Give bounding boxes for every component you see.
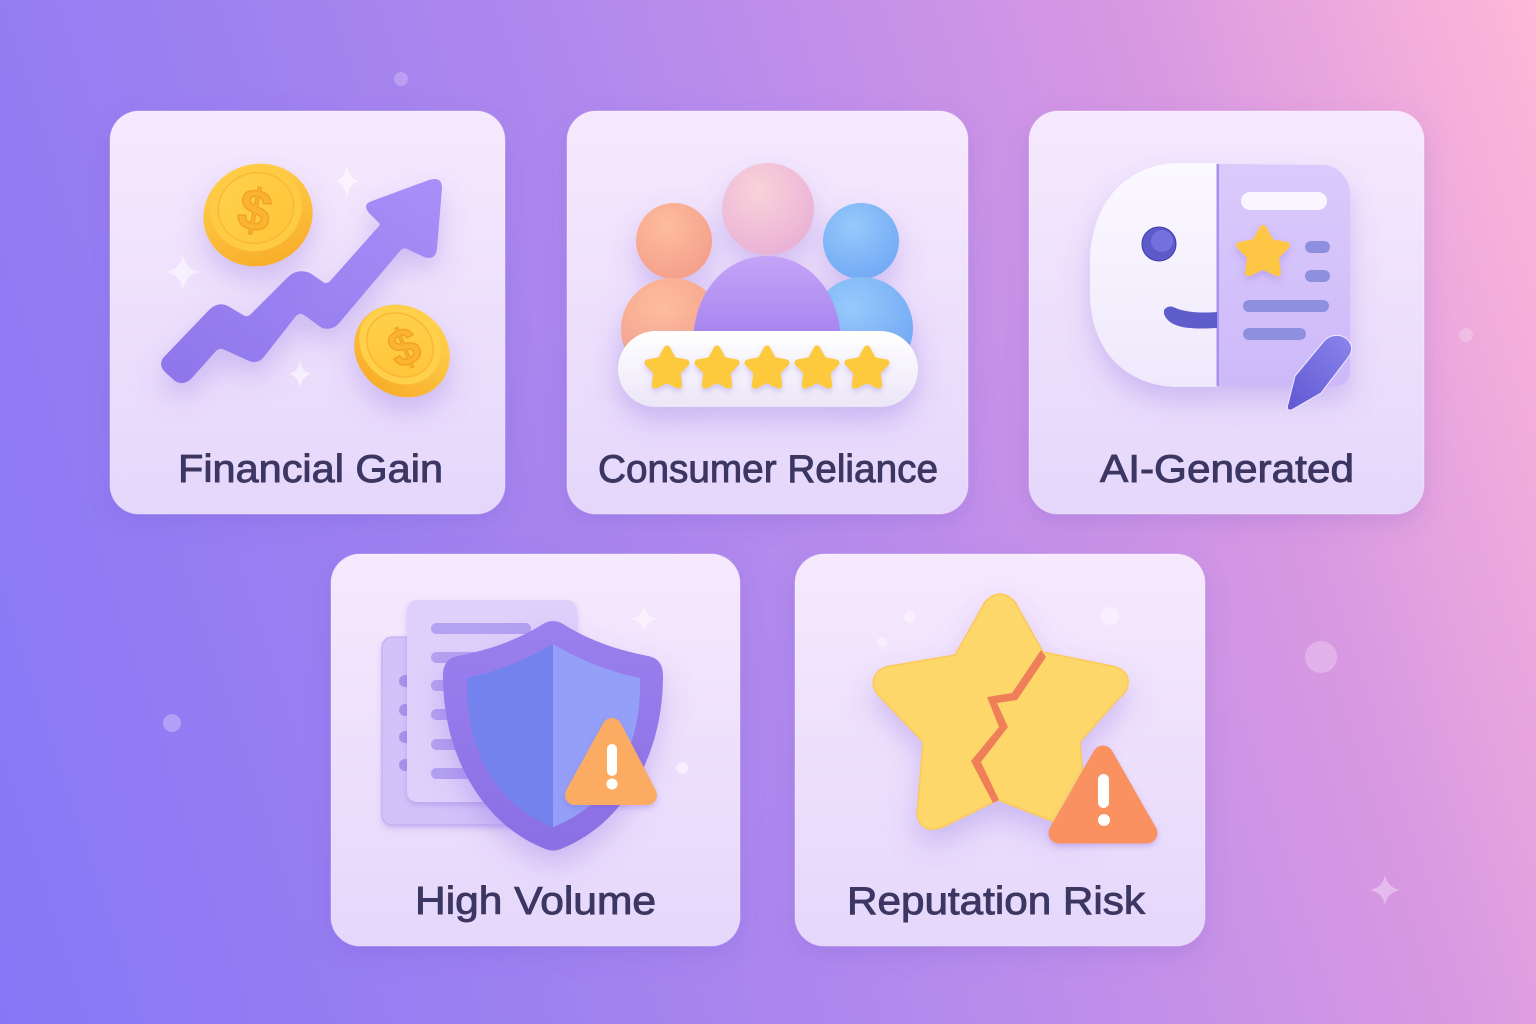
panel: high volume (331, 554, 740, 946)
panel: reputation risk (795, 554, 1205, 946)
label: Reputation Risk: Reputation Risk (847, 880, 1146, 923)
panel: financial gain (110, 111, 505, 514)
icon: cracked star with warning (873, 594, 1147, 833)
label: Financial Gain: Financial Gain (178, 448, 443, 491)
panel: ai-generated (1029, 111, 1424, 514)
icon: rising arrow with coins: $ (232, 175, 277, 246)
icon: document stack with shield and warning (382, 600, 688, 850)
icon: people with five star rating (618, 163, 918, 407)
icon: half face half document with pen (1090, 163, 1352, 410)
background decorative dots and sparkle (163, 72, 1473, 905)
panel: consumer reliance (567, 111, 968, 514)
icon: rising arrow with coins (161, 150, 468, 416)
label: Consumer Reliance: Consumer Reliance (598, 448, 938, 491)
icon: rising arrow with coins: $ (380, 316, 429, 380)
label: High Volume: High Volume (415, 880, 656, 923)
label: AI-Generated: AI-Generated (1100, 448, 1354, 491)
